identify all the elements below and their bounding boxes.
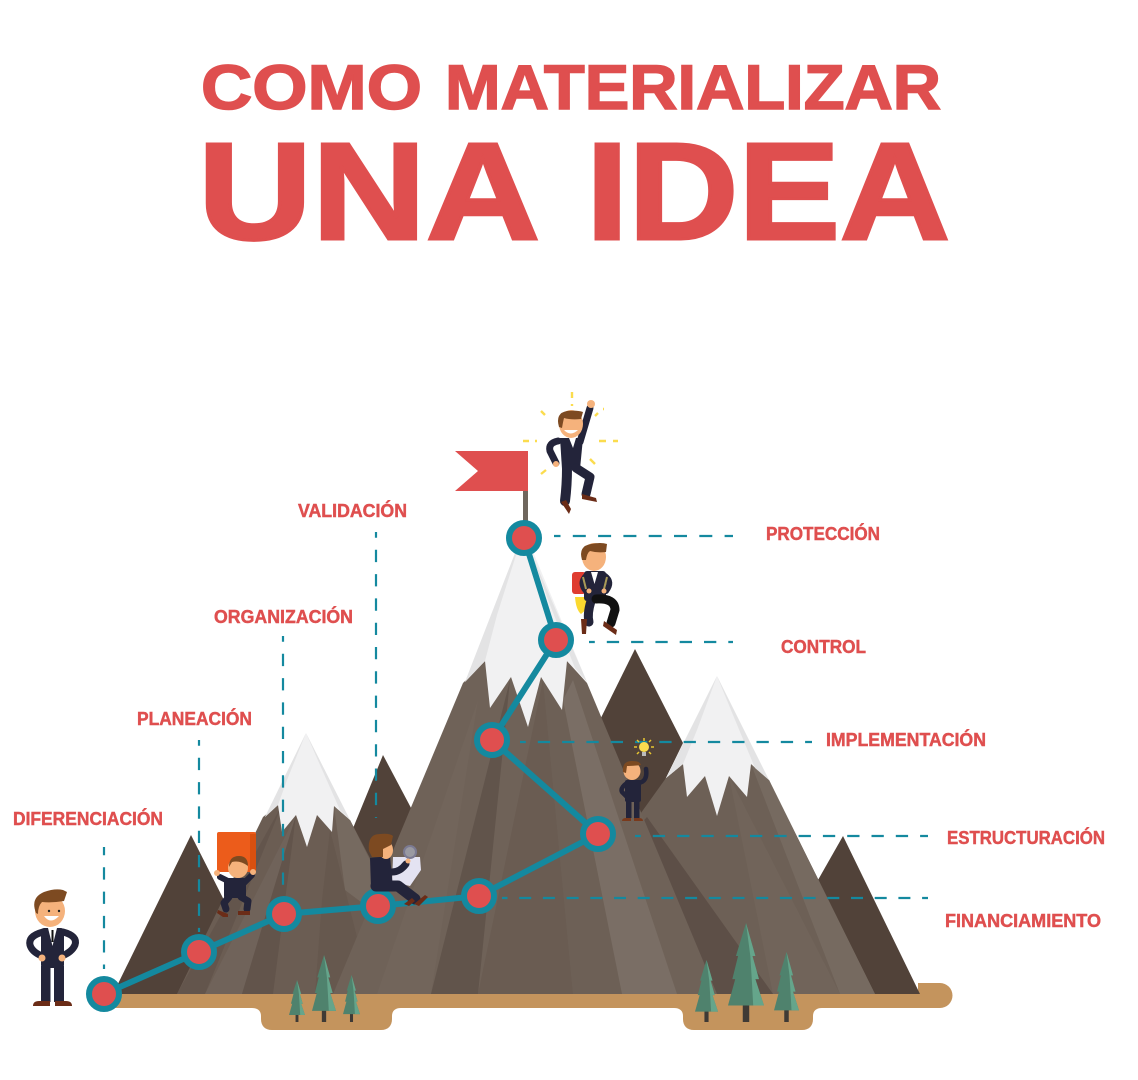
ground platform xyxy=(104,983,952,1030)
back peak far right xyxy=(790,836,920,994)
step labels xyxy=(13,500,1105,931)
path line xyxy=(104,538,598,994)
mountain range xyxy=(113,530,920,994)
label: protección: PROTECCIÓN xyxy=(766,523,880,544)
right mountain snow xyxy=(666,676,769,816)
character: man with idea xyxy=(622,738,654,821)
title line 2: IDEA xyxy=(586,115,950,269)
back peak centre right xyxy=(590,649,683,817)
label: diferenciación: DIFERENCIACIÓN xyxy=(13,808,163,829)
flag xyxy=(455,451,528,525)
tree xyxy=(695,960,718,1022)
character: man carrying box xyxy=(214,832,256,917)
back peak far left xyxy=(113,835,262,994)
title line 1 xyxy=(201,53,941,123)
main mountain snow xyxy=(465,530,587,727)
character: man celebrating at summit xyxy=(523,392,618,514)
label: control: CONTROL xyxy=(781,637,866,657)
label: validación: VALIDACIÓN xyxy=(298,500,407,521)
tree xyxy=(343,975,360,1022)
icon: light bulb xyxy=(634,738,654,756)
right mountain xyxy=(600,676,875,994)
main mountain xyxy=(333,530,717,994)
back peak middle xyxy=(340,755,428,900)
label: financiamiento: FINANCIAMIENTO xyxy=(945,911,1101,931)
label: implementación: IMPLEMENTACIÓN xyxy=(826,729,986,750)
title line 1: MATERIALIZAR xyxy=(445,53,941,123)
character: man seated with document and magnifier xyxy=(369,834,428,906)
label: estructuración: ESTRUCTURACIÓN xyxy=(947,827,1105,848)
trees right group xyxy=(695,923,799,1022)
title line 2: UNA xyxy=(198,115,540,269)
label: planeación: PLANEACIÓN xyxy=(137,708,252,729)
character: man with jetpack xyxy=(572,543,617,635)
left mountain xyxy=(177,733,400,994)
path nodes xyxy=(89,523,613,1009)
character: standing businessman xyxy=(30,889,76,1006)
sparkle rays xyxy=(523,392,618,474)
title xyxy=(198,53,950,269)
title line 2 xyxy=(198,115,950,269)
trees left group xyxy=(289,955,360,1022)
tree xyxy=(728,923,764,1022)
label: organización: ORGANIZACIÓN xyxy=(214,606,353,627)
title line 1: COMO xyxy=(201,53,422,123)
left mountain snow xyxy=(265,733,350,847)
dashed leader lines xyxy=(104,532,928,969)
tree xyxy=(774,952,799,1022)
tree xyxy=(289,980,305,1022)
tree xyxy=(312,955,336,1022)
